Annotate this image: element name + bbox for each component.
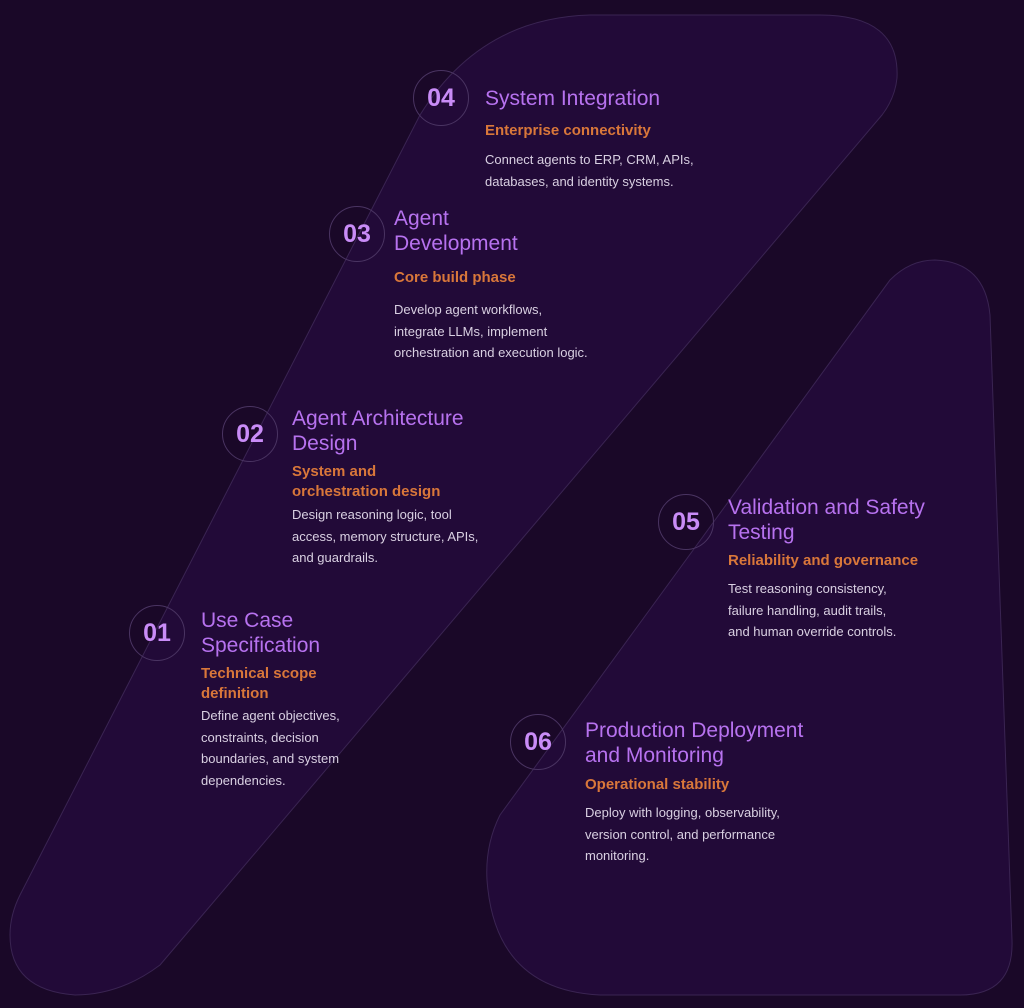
step 01 <box>129 605 340 788</box>
shape: right band <box>487 260 1012 995</box>
text: Validation and Safety <box>728 496 925 519</box>
text: Development <box>394 232 518 255</box>
text: Develop agent workflows, <box>394 302 542 317</box>
text: Agent <box>394 207 449 230</box>
text: Test reasoning consistency, <box>728 581 887 596</box>
step 06 <box>510 714 804 863</box>
text: and human override controls. <box>728 624 896 639</box>
text: and guardrails. <box>292 550 378 565</box>
text: constraints, decision <box>201 730 319 744</box>
text: Agent Architecture <box>292 407 464 430</box>
step 02 <box>222 406 478 565</box>
text: 01 <box>143 619 171 647</box>
text: 05 <box>672 508 700 536</box>
text: Enterprise connectivity <box>485 122 651 139</box>
text: Testing <box>728 521 795 544</box>
text: Production Deployment <box>585 719 803 742</box>
text: System Integration <box>485 87 660 110</box>
text: Design reasoning logic, tool <box>292 507 452 522</box>
text: Core build phase <box>394 269 516 286</box>
text: 03 <box>343 220 371 248</box>
text: failure handling, audit trails, <box>728 602 886 618</box>
text: and Monitoring <box>585 744 724 767</box>
text: Deploy with logging, observability, <box>585 805 780 820</box>
text: Technical scope <box>201 665 317 682</box>
text: Reliability and governance <box>728 552 918 569</box>
text: Connect agents to ERP, CRM, APIs, <box>485 152 694 167</box>
text: 04 <box>427 84 455 112</box>
text: databases, and identity systems. <box>485 174 674 188</box>
text: Define agent objectives, <box>201 708 340 723</box>
text: 06 <box>524 728 552 756</box>
text: boundaries, and system <box>201 751 339 766</box>
text: Specification <box>201 634 320 657</box>
text: Use Case <box>201 609 293 632</box>
text: Design <box>292 432 357 455</box>
text: dependencies. <box>201 772 286 788</box>
text: monitoring. <box>585 848 649 863</box>
step 03 <box>329 206 588 360</box>
text: version control, and performance <box>585 826 775 842</box>
text: Operational stability <box>585 776 729 793</box>
text: orchestration and execution logic. <box>394 345 588 360</box>
text: orchestration design <box>292 483 440 500</box>
step 05 <box>658 494 925 639</box>
text: access, memory structure, APIs, <box>292 528 478 544</box>
text: 02 <box>236 420 264 448</box>
step 04 <box>413 70 694 188</box>
text: integrate LLMs, implement <box>394 324 547 338</box>
text: System and <box>292 463 376 480</box>
text: definition <box>201 685 268 702</box>
